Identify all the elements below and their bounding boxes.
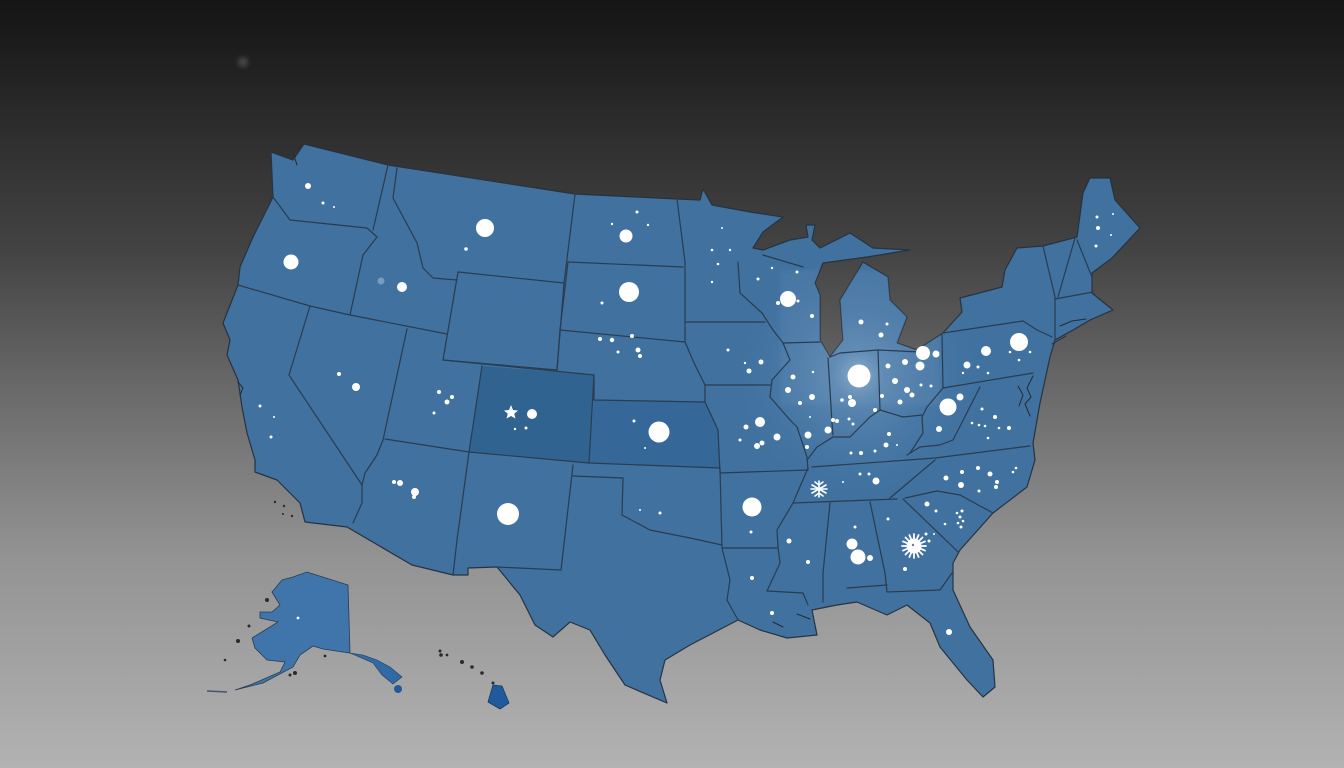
inset: Hawaii [438,650,509,709]
icon: star in Colorado [504,405,518,418]
large dots [284,219,1028,564]
big island [488,685,509,709]
icon: sunburst in Georgia [902,534,926,558]
medium dots [305,183,991,635]
Hawaiian island chain [438,650,494,684]
Alaska mainland [235,572,350,690]
southern California islands [274,501,293,517]
land outline [223,144,1140,703]
faint dot in Idaho [378,278,384,284]
state borders [238,165,1093,620]
markers: white population dots [258,183,1114,635]
icon: snowflake in Tennessee [811,481,827,497]
state: Kansas (darker) [589,400,720,468]
map: contiguous United States [223,144,1140,703]
central glow [778,268,948,448]
Aleutian chain [207,691,227,692]
state: Colorado (darker) [469,366,594,463]
inset: Alaska [207,572,402,693]
Alaska panhandle [350,653,402,684]
small southeast island [394,685,402,693]
coastal islands [224,598,326,676]
small dots [258,202,1114,615]
faint blurred speck [238,57,248,67]
coastline details [238,152,1086,627]
Alaska cities [297,617,299,619]
